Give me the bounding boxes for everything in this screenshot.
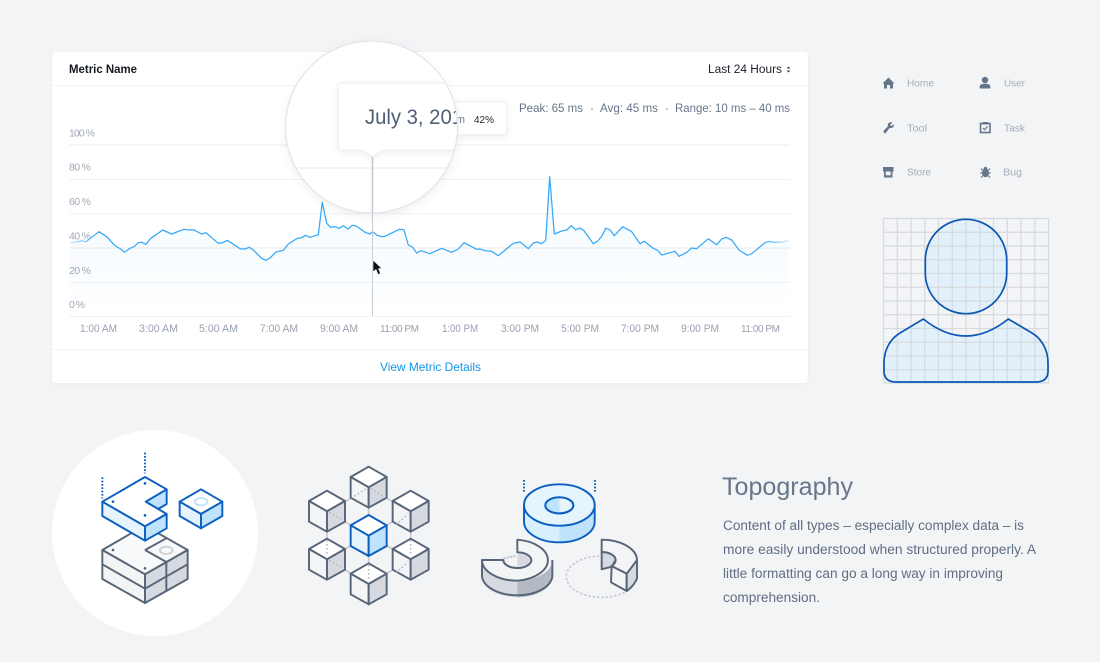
x axis labels: 11:00 PM: [380, 324, 419, 335]
cube: upper right: [393, 491, 429, 532]
card title: Metric Name: [69, 64, 137, 76]
cube: lower right: [393, 539, 429, 580]
cube: upper left: [309, 491, 345, 532]
stats summary: Peak: 65 ms: [519, 101, 583, 115]
magnified tooltip: July 3, 201: [365, 106, 463, 129]
icon: bug: Bug: [1003, 168, 1022, 178]
y axis labels: 20 %: [69, 265, 91, 277]
area under line: [70, 177, 788, 316]
head and shoulders fill: [884, 219, 1048, 382]
magnifier lens: [285, 41, 480, 213]
grey C ring: [482, 540, 552, 597]
x axis labels: 5:00 AM: [199, 323, 238, 335]
cube: centre blue: [351, 515, 387, 556]
card background: [52, 52, 808, 383]
time range selector: Last 24 Hours: [708, 64, 782, 76]
icon: bug: [980, 167, 1022, 178]
y axis labels: 60 %: [69, 196, 91, 208]
stats summary: Range: 10 ms – 40 ms: [675, 101, 790, 115]
grey block stack: [102, 533, 188, 603]
y axis labels: 80 %: [69, 162, 91, 174]
icon: store: [883, 167, 931, 178]
connectors: [327, 498, 411, 573]
x axis labels: 11:00 PM: [741, 324, 780, 335]
cube: bottom: [351, 563, 387, 604]
cube: top: [351, 467, 387, 508]
icon: home: Home: [907, 78, 934, 90]
x axis labels: [80, 323, 780, 335]
illustration: cube cluster: [309, 467, 429, 604]
cube: lower left: [309, 539, 345, 580]
details link: View Metric Details: [380, 360, 481, 374]
icon: task: [980, 122, 1026, 134]
grey ring segment: [602, 540, 637, 591]
hover marker line: [372, 212, 374, 316]
white circle: [52, 430, 258, 636]
small tooltip behind lens: [420, 102, 507, 135]
stats summary: ·: [590, 101, 594, 115]
icon: tool: Tool: [907, 124, 927, 134]
grid: [884, 218, 1048, 383]
x axis labels: 7:00 AM: [260, 323, 298, 335]
small tooltip behind lens: m: [456, 114, 465, 126]
y axis labels: 100 %: [69, 128, 95, 140]
icon: home: [882, 78, 934, 90]
user outline: [884, 219, 1048, 382]
magnified tooltip: [337, 82, 457, 158]
blue notched block: [102, 453, 167, 541]
icon: task: Task: [1004, 124, 1026, 134]
body copy: little formatting can go a long way in improving: [723, 566, 1003, 581]
y axis labels: [69, 128, 95, 311]
body copy: more easily understood when structured properly. A: [723, 542, 1036, 557]
icon: user: User: [1004, 78, 1026, 90]
icon list: [882, 77, 1026, 178]
icon: tool: [884, 122, 927, 134]
y axis labels: 0 %: [69, 299, 85, 311]
x axis labels: 3:00 PM: [501, 323, 539, 335]
x axis labels: 3:00 AM: [139, 323, 178, 335]
stats summary: [519, 101, 790, 115]
blue ring: [524, 480, 595, 542]
body copy: [723, 518, 1036, 605]
cursor: [373, 260, 382, 274]
body copy: comprehension.: [723, 590, 820, 605]
x axis labels: 1:00 PM: [442, 323, 478, 335]
illustration: stacked blocks in circle: [52, 430, 258, 636]
dotted hidden edges: [327, 489, 411, 580]
icon: store: Store: [907, 168, 931, 178]
chart grid lines: [69, 145, 790, 316]
illustration: rings: [482, 480, 637, 597]
x axis labels: 5:00 PM: [561, 323, 599, 335]
panel: metric chart card: [52, 41, 808, 383]
dotted ghost ellipse: [566, 556, 637, 597]
stats summary: Avg: 45 ms: [600, 101, 658, 115]
body copy: Content of all types – especially complex data – is: [723, 518, 1024, 533]
x axis labels: 9:00 AM: [320, 323, 358, 335]
heading: Topography: [722, 473, 853, 501]
y axis labels: 40 %: [69, 230, 91, 242]
blue small cube: [180, 489, 222, 528]
x axis labels: 1:00 AM: [80, 323, 117, 335]
small tooltip behind lens: 42%: [474, 114, 494, 126]
icon construction grid: user: [884, 218, 1048, 383]
data line: [70, 177, 788, 260]
text block: topography: [722, 473, 1036, 605]
stats summary: ·: [665, 101, 669, 115]
icon: user: [980, 77, 1026, 90]
x axis labels: 7:00 PM: [621, 323, 659, 335]
x axis labels: 9:00 PM: [681, 323, 719, 335]
